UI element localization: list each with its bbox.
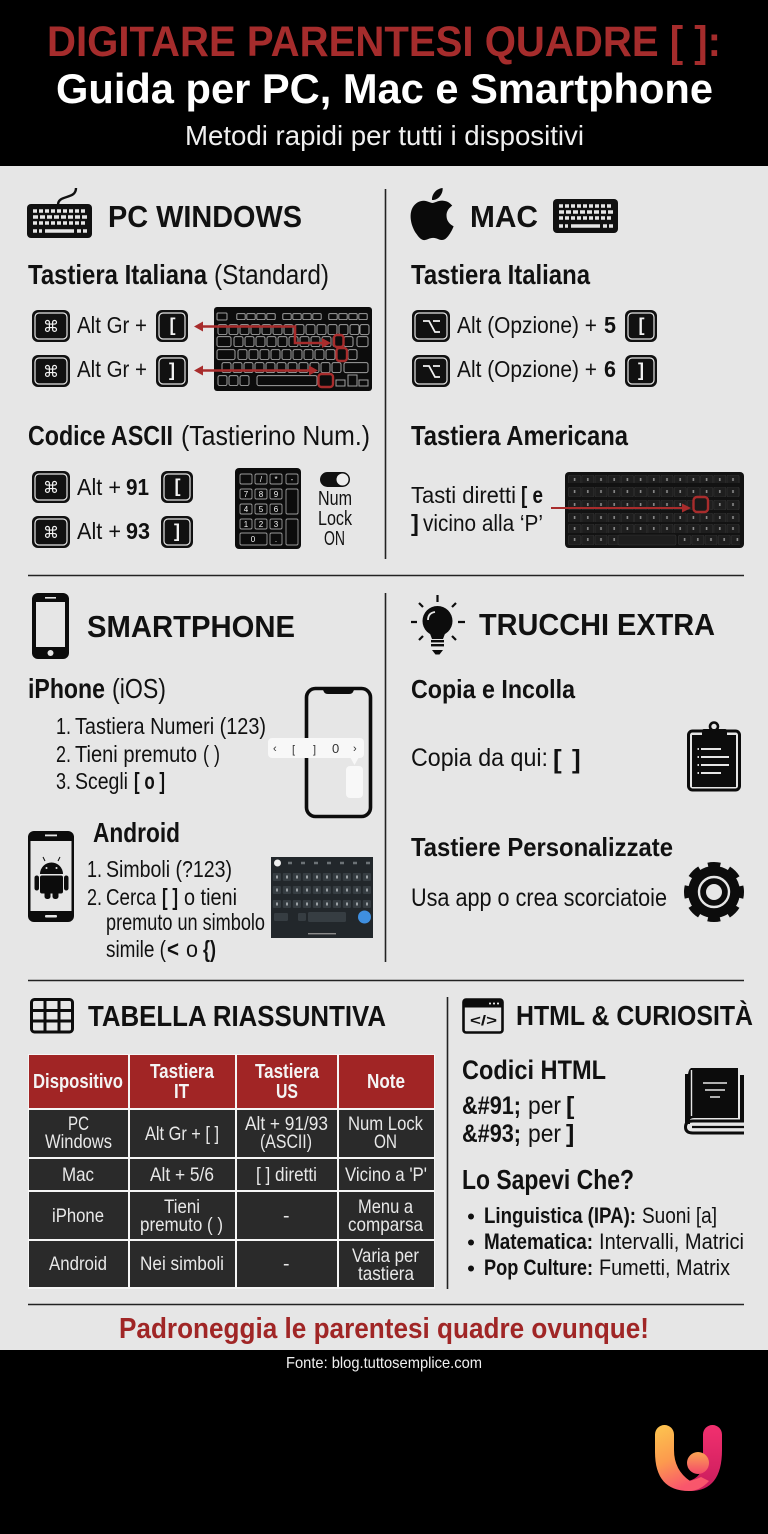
icon: keyboard with cable — [27, 188, 92, 238]
icon: light bulb — [411, 595, 465, 654]
table row: android: Nei simboli — [140, 1253, 224, 1275]
illustration: numeric keypad: 4 — [244, 505, 249, 514]
shortcut: option 5: [ — [638, 315, 644, 335]
illustration: numeric keypad: - — [291, 475, 294, 484]
shortcut: alt 91: 91 — [126, 474, 149, 500]
heading: tabella riassuntiva: TABELLA RIASSUNTIVA — [88, 1001, 386, 1033]
illustration: numeric keypad: 2 — [259, 520, 264, 529]
shortcut: alt 93: ⌘ — [43, 523, 59, 542]
list: iphone steps: ( ) — [203, 741, 220, 767]
toggle: num lock on — [318, 472, 353, 550]
illustration: numeric keypad: 0 — [251, 535, 256, 544]
panel: smartphone — [28, 593, 373, 962]
logo right arm — [688, 1425, 722, 1491]
popup menu — [268, 738, 364, 798]
shortcut: option 6: ] — [638, 360, 644, 380]
table row: pc windows: Alt Gr + [ ] — [145, 1123, 219, 1145]
subheading: codice ascii — [28, 420, 370, 451]
icon: clipboard — [688, 722, 740, 790]
list: curiosities — [468, 1203, 744, 1280]
popup menu: ‹ — [273, 743, 277, 755]
table row: pc windows: ON — [374, 1131, 397, 1153]
heading: pc windows: PC WINDOWS — [108, 199, 302, 234]
table row: mac: [ ] diretti — [256, 1164, 317, 1186]
shortcut: alt 93: Alt + — [77, 518, 121, 544]
table header row: Dispositivo — [33, 1070, 123, 1093]
table row: mac: Alt + 5/6 — [150, 1164, 214, 1186]
table row: android: Android — [49, 1253, 107, 1275]
header band — [0, 0, 768, 166]
icon: html code window — [464, 1000, 502, 1032]
logo ball — [687, 1452, 709, 1474]
table row: pc windows: Windows — [45, 1131, 112, 1153]
source line: Fonte: blog.tuttosemplice.com — [286, 1355, 482, 1372]
table row: iphone: comparsa — [348, 1214, 423, 1236]
heading: smartphone: SMARTPHONE — [87, 609, 295, 644]
subheading: tastiera italiana: Tastiera Italiana — [28, 259, 208, 290]
table row: pc windows: Num Lock — [348, 1113, 423, 1135]
shortcut: alt 93: 93 — [126, 518, 150, 544]
text: tasti diretti: Tasti diretti — [411, 482, 516, 508]
list: curiosities: Linguistica (IPA): — [484, 1203, 636, 1228]
illustration: numeric keypad: . — [275, 535, 277, 544]
table row: android: - — [283, 1253, 290, 1275]
table row: android — [29, 1241, 434, 1287]
text: copia da qui: ] — [572, 744, 581, 774]
illustration: numeric keypad: 1 — [244, 520, 249, 529]
illustration: iphone popup — [268, 688, 370, 816]
shortcut: option 6 — [412, 355, 657, 387]
shortcut: option 6: 6 — [604, 356, 616, 382]
text: tasti diretti: ] — [411, 510, 419, 536]
subheading: tastiera italiana: Tastiera Italiana — [411, 259, 591, 290]
arrow: close bracket to key — [194, 366, 318, 376]
panel: html e curiosita — [462, 1000, 753, 1280]
list: iphone steps — [56, 713, 266, 794]
list: android steps: < — [167, 936, 179, 962]
table header row: IT — [174, 1080, 189, 1103]
list: android steps — [87, 856, 265, 962]
toggle: num lock on: ON — [324, 528, 345, 550]
subheading: iphone: iPhone — [28, 673, 105, 704]
shortcut: alt gr close bracket: ] — [169, 360, 175, 380]
table row: pc windows: Alt + 91/93 — [245, 1113, 328, 1135]
content background — [0, 166, 768, 1350]
red highlighted keys — [318, 335, 347, 387]
arrow to p key — [551, 504, 691, 512]
red highlighted key — [694, 497, 708, 512]
title: DIGITARE PARENTESI QUADRE [ ]: — [47, 18, 721, 66]
subheading: tastiera italiana: (Standard) — [214, 259, 329, 290]
list: iphone steps: Tieni premuto — [75, 741, 197, 767]
text: html codes: ] — [566, 1120, 574, 1148]
icon: smartphone — [32, 593, 69, 659]
tagline: Metodi rapidi per tutti i dispositivi — [185, 120, 584, 151]
text: html codes — [462, 1092, 575, 1148]
illustration: numeric keypad: 3 — [274, 520, 279, 529]
illustration: numeric keypad: 9 — [274, 490, 279, 499]
table: summary — [28, 1054, 435, 1289]
subheading: codici html: Codici HTML — [462, 1055, 606, 1085]
table row: iphone: Tieni — [164, 1196, 200, 1218]
table row: iphone: premuto ( ) — [140, 1214, 223, 1236]
illustration: numeric keypad: * — [274, 475, 278, 484]
list: android steps: simile ( — [106, 936, 166, 962]
header — [0, 0, 768, 166]
shortcut: alt 91 — [32, 471, 193, 503]
illustration: numeric keypad: 5 — [259, 505, 264, 514]
toggle: num lock on: Num — [318, 488, 352, 510]
text: usa app: Usa app o crea scorciatoie — [411, 884, 667, 912]
icon: book — [685, 1068, 744, 1133]
text: html codes: per — [528, 1092, 561, 1120]
list: android steps: 1. — [87, 856, 102, 882]
table row: pc windows — [29, 1110, 434, 1157]
subheading: tastiere personalizzate: Tastiere Personalizzate — [411, 832, 673, 862]
icon: gear — [688, 866, 740, 918]
shortcut: alt 93: ] — [174, 521, 180, 541]
list: android steps: o — [186, 936, 198, 962]
shortcut: alt 91: [ — [174, 476, 180, 496]
shortcut: option 5: 5 — [604, 312, 616, 338]
illustration: numeric keypad: 8 — [259, 490, 264, 499]
list: iphone steps: Scegli — [75, 768, 128, 794]
closing message: Padroneggia le parentesi quadre ovunque! — [119, 1313, 649, 1345]
subheading: lo sapevi che: Lo Sapevi Che? — [462, 1164, 634, 1195]
subheading: copia e incolla: Copia e Incolla — [411, 674, 575, 704]
panel: mac — [411, 188, 744, 548]
list: android steps: premuto un simbolo — [106, 909, 265, 935]
icon: html code window: </> — [470, 1012, 497, 1028]
table row: mac: Mac — [62, 1164, 94, 1186]
shortcut: option 6: Alt (Opzione) + — [457, 356, 597, 382]
heading: mac: MAC — [470, 199, 538, 234]
text: tasti diretti: vicino alla ‘P’ — [423, 510, 543, 536]
list: curiosities: Matematica: — [484, 1229, 593, 1254]
popup menu: › — [353, 743, 357, 755]
popup menu: ] — [313, 744, 316, 756]
list: iphone steps: Tastiera Numeri (123) — [75, 713, 266, 739]
illustration: numeric keypad: / — [260, 475, 263, 484]
table header row: Note — [367, 1070, 405, 1093]
heading: trucchi extra: TRUCCHI EXTRA — [479, 607, 715, 642]
arrow: open bracket to key — [194, 322, 331, 348]
table header row — [29, 1055, 434, 1108]
subheading: tastiera americana: Tastiera Americana — [411, 420, 629, 451]
text: copia da qui: Copia da qui: — [411, 744, 548, 772]
text: html codes: &#93; — [462, 1120, 521, 1148]
list: iphone steps: 1. — [56, 713, 71, 739]
list: curiosities: Fumetti, Matrix — [599, 1255, 730, 1280]
icon: table — [32, 1000, 72, 1032]
shortcut: alt 93 — [32, 516, 193, 548]
subheading: codice ascii: Codice ASCII — [28, 420, 173, 451]
logo left arm — [655, 1425, 709, 1491]
table header row: Tastiera — [255, 1060, 319, 1083]
shortcut: alt gr open bracket: [ — [170, 315, 176, 335]
table row: android: Varia per — [352, 1245, 419, 1267]
illustration: numeric keypad: 7 — [244, 490, 249, 499]
panel: tabella riassuntiva — [28, 1000, 435, 1289]
list: android steps: Simboli (?123) — [106, 856, 232, 882]
panel: pc windows — [27, 188, 372, 550]
list: android steps: Cerca — [106, 884, 157, 910]
table row: iphone: Menu a — [358, 1196, 413, 1218]
list: android steps: [ ] — [162, 884, 178, 910]
shortcut: option 5 — [412, 310, 657, 342]
shortcut: alt gr close bracket: Alt Gr + — [77, 356, 147, 382]
table row: iphone: iPhone — [52, 1205, 104, 1227]
shortcut: alt gr open bracket: Alt Gr + — [77, 312, 147, 338]
list: iphone steps: 3. — [56, 768, 71, 794]
list: curiosities: Pop Culture: — [484, 1255, 593, 1280]
table header row: US — [276, 1080, 298, 1103]
table row: mac — [29, 1159, 434, 1190]
illustration: android keyboard — [271, 857, 373, 938]
list: curiosities: Intervalli, Matrici — [599, 1229, 744, 1254]
list: android steps: 2. — [87, 884, 102, 910]
icon: android phone — [28, 831, 74, 922]
illustration: italian keyboard — [214, 307, 372, 391]
table row: pc windows: PC — [68, 1113, 89, 1135]
table row: iphone: - — [283, 1205, 290, 1227]
text: html codes: per — [528, 1120, 561, 1148]
subheading: android: Android — [93, 817, 180, 848]
illustration: numeric keypad — [235, 468, 301, 549]
table header row: Tastiera — [150, 1060, 214, 1083]
text: copia da qui: [ — [553, 744, 562, 774]
table row: mac: Vicino a 'P' — [345, 1164, 427, 1186]
shortcut: alt gr open bracket — [32, 310, 188, 342]
shortcut: alt gr close bracket — [32, 355, 188, 387]
popup menu: [ — [292, 744, 295, 756]
icon: keyboard — [553, 199, 618, 233]
table row: pc windows: (ASCII) — [260, 1131, 312, 1153]
panel: trucchi extra — [411, 595, 740, 918]
shortcut: option 5: Alt (Opzione) + — [457, 312, 597, 338]
list: curiosities: Suoni [a] — [642, 1203, 717, 1228]
illustration: american keyboard — [551, 472, 744, 548]
subtitle line: Guida per PC, Mac e Smartphone — [56, 65, 713, 112]
table row: iphone — [29, 1192, 434, 1239]
shortcut: alt 91: ⌘ — [43, 478, 59, 497]
subheading: iphone — [28, 673, 166, 704]
shortcut: alt 91: Alt + — [77, 474, 121, 500]
subheading: tastiera italiana — [28, 259, 329, 290]
text: html codes: [ — [566, 1092, 575, 1120]
list: android steps: {) — [203, 936, 216, 962]
subheading: codice ascii: (Tastierino Num.) — [181, 420, 370, 451]
text: tasti diretti: [ e — [521, 482, 543, 508]
toggle: num lock on: Lock — [318, 508, 353, 530]
shortcut: alt gr open bracket: ⌘ — [43, 317, 59, 336]
logo — [655, 1425, 722, 1491]
list: iphone steps: 2. — [56, 741, 71, 767]
list: iphone steps: [ o ] — [134, 768, 165, 794]
popup menu: 0 — [332, 741, 339, 756]
text: html codes: &#91; — [462, 1092, 521, 1120]
shortcut: alt gr close bracket: ⌘ — [43, 362, 59, 381]
illustration: numeric keypad: 6 — [274, 505, 279, 514]
table row: android: tastiera — [358, 1263, 414, 1285]
icon: apple logo — [411, 188, 454, 240]
list: android steps: o tieni — [184, 884, 237, 910]
subheading: iphone: (iOS) — [112, 673, 166, 704]
text: tasti diretti — [411, 482, 543, 536]
